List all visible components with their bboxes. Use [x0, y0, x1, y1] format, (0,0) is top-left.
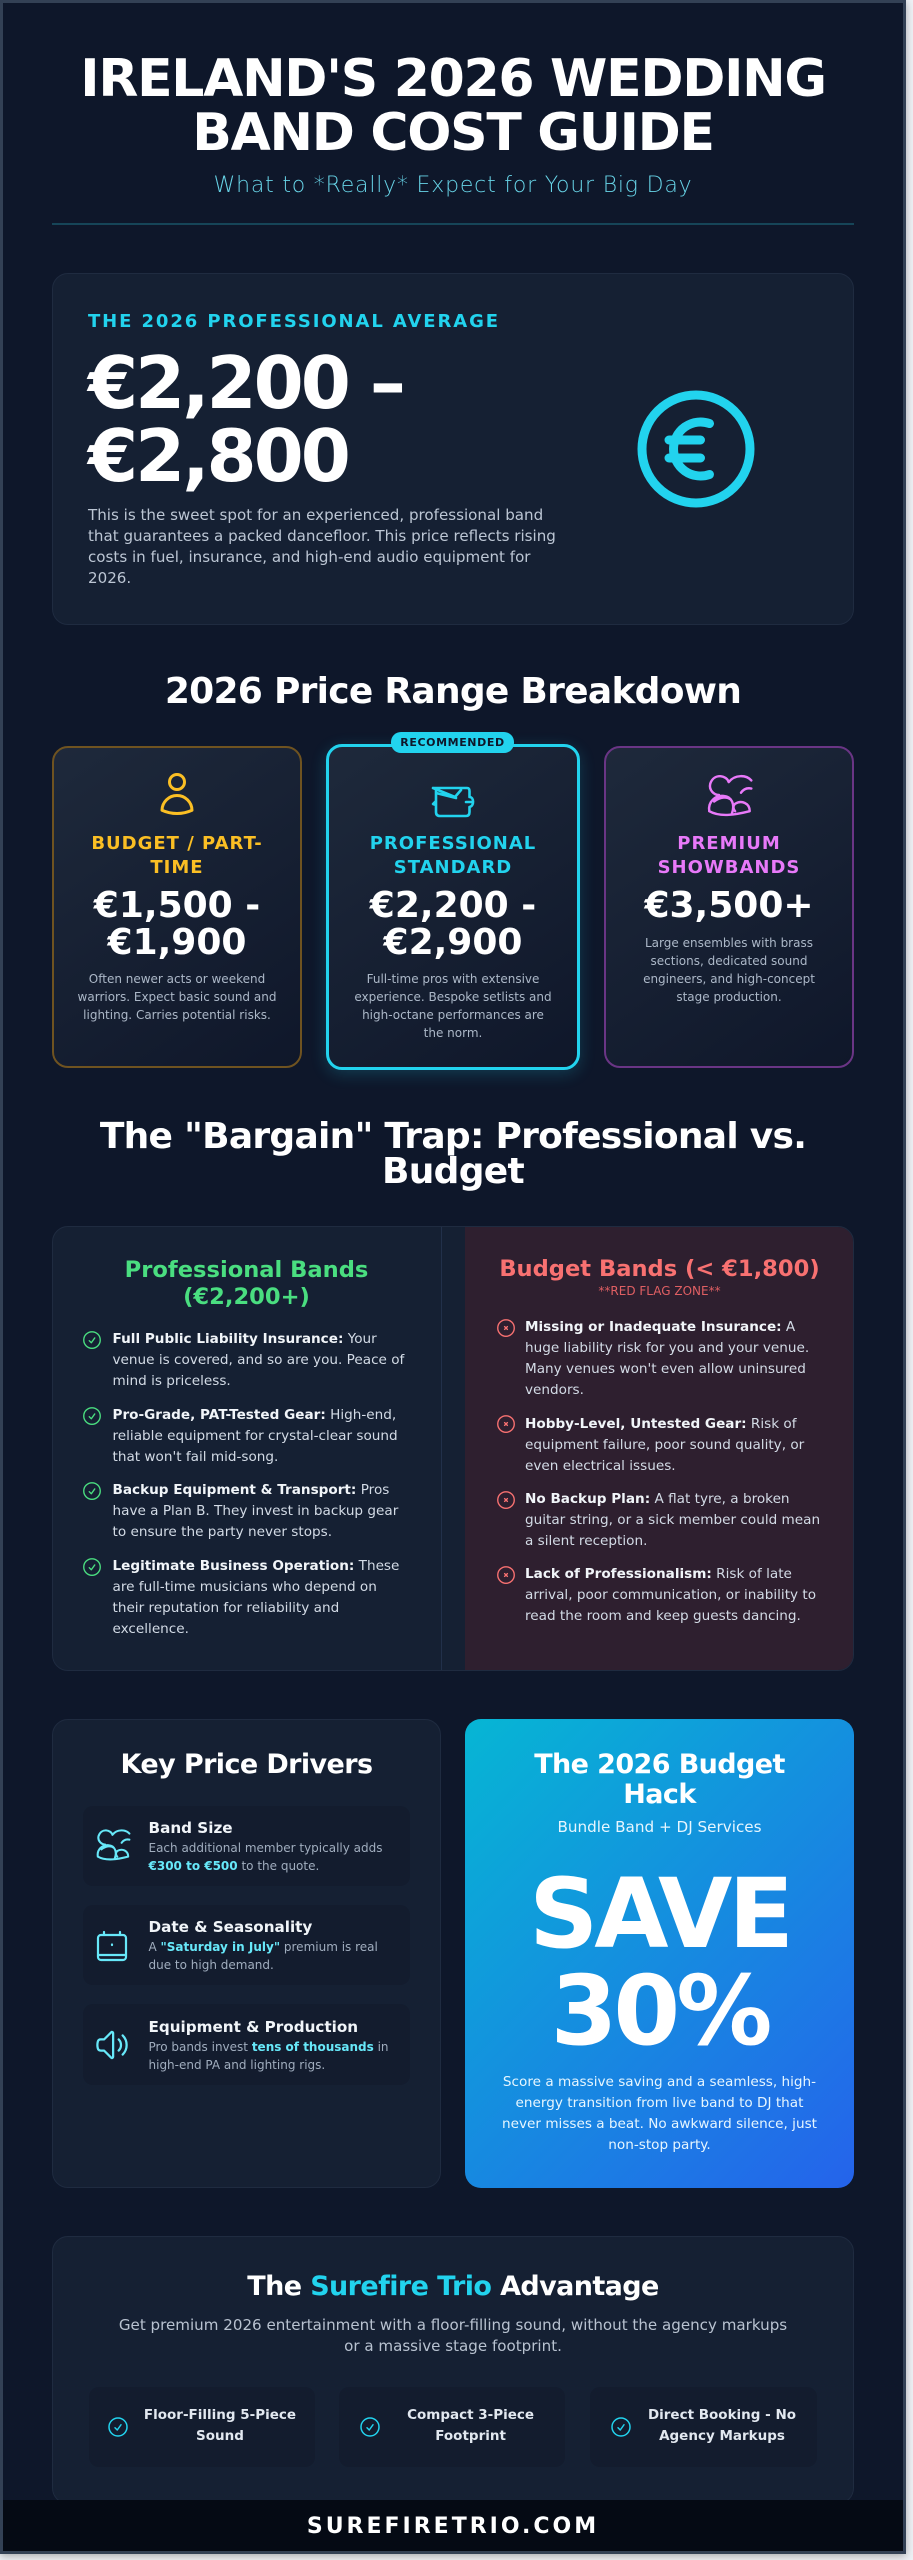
list item: insurance: Full Public Liability Insurance: Your [112, 1331, 377, 1347]
professional tier title: PROFESSIONAL [370, 833, 536, 854]
list item: no backup: No Backup Plan: A flat tyre, a broken [525, 1491, 790, 1507]
panel: professional average [52, 273, 854, 625]
list item: insurance: mind is priceless. [112, 1373, 231, 1389]
list item: no insurance [525, 1319, 809, 1398]
list item: business: excellence. [112, 1621, 189, 1637]
list item: insurance [112, 1331, 405, 1389]
budget hack description [465, 2072, 854, 2156]
band size description: Each additional member typically adds [148, 1841, 383, 1855]
icon: check [106, 2415, 130, 2439]
budget tier price [93, 885, 260, 963]
list item: business: their reputation for reliability and [112, 1600, 339, 1616]
panel: surefire trio [52, 2236, 854, 2504]
chip: floor-filling sound [88, 2387, 315, 2467]
list item: gear [112, 1407, 398, 1465]
list item: gear: that won't fail mid-song. [112, 1449, 278, 1465]
driver card: band size [83, 1806, 410, 1886]
key price drivers heading: Key Price Drivers [121, 1749, 372, 1780]
premium tier description: stage production. [676, 990, 782, 1004]
list item: hobby gear: equipment failure, poor sound quality, or [525, 1437, 804, 1453]
professional tier description: experience. Bespoke setlists and [354, 990, 552, 1004]
list item: business: Legitimate Business Operation: These [112, 1558, 399, 1574]
list item: unprofessional: arrival, poor communication, or inability to [525, 1587, 816, 1603]
icon: speaker [96, 2030, 128, 2060]
driver card: date [83, 1905, 410, 1985]
professional tier title [370, 833, 536, 878]
average description: costs in fuel, insurance, and high-end audio equipment for [88, 548, 531, 566]
professional tier price [369, 885, 536, 963]
list item: backup: to ensure the party never stops. [112, 1524, 332, 1540]
budget hack heading: Hack [623, 1779, 696, 1810]
budget hack heading: The 2026 Budget [534, 1749, 785, 1780]
budget hack description: Score a massive saving and a seamless, high- [503, 2074, 816, 2090]
list item: no insurance: huge liability risk for you and your venue. [525, 1340, 809, 1356]
heading: bargain trap: Budget [382, 1151, 524, 1192]
budget hack description: never misses a beat. No awkward silence, just [502, 2116, 817, 2132]
panel: professional tier [326, 744, 580, 1070]
surefire trio heading: The Surefire Trio Advantage [247, 2271, 659, 2302]
premium tier description: Large ensembles with brass [645, 936, 813, 950]
icon: group [708, 774, 753, 816]
professional tier price: €2,200 - [370, 885, 536, 926]
chip text [140, 2405, 300, 2447]
average description: that guarantees a packed dancefloor. This price reflects rising [88, 527, 556, 545]
save 30 percent: 30% [551, 1955, 768, 2067]
icon: cross [497, 1566, 515, 1584]
list item: unprofessional: read the room and keep guests dancing. [525, 1608, 801, 1624]
chip text: Floor-Filling 5-Piece [144, 2407, 296, 2423]
date title: Date & Seasonality [148, 1918, 312, 1936]
premium tier description [643, 936, 815, 1004]
average price: €2,200 – [88, 341, 403, 425]
list item: gear: reliable equipment for crystal-clear sound [112, 1428, 398, 1444]
icon: check [83, 1558, 101, 1576]
title [80, 49, 826, 163]
premium tier price: €3,500+ [644, 885, 814, 926]
icon: cross [497, 1491, 515, 1509]
budget tier title [91, 833, 263, 878]
list item: backup: Backup Equipment & Transport: Pros [112, 1482, 389, 1498]
icon: euro coin [638, 390, 754, 508]
list item: unprofessional: Lack of Professionalism: Risk of late [525, 1566, 792, 1582]
equipment description [148, 2040, 389, 2072]
list item: business [112, 1558, 399, 1637]
list item: business: are full-time musicians who depend on [112, 1579, 377, 1595]
list item: no backup [525, 1491, 820, 1549]
professional bands heading [125, 1257, 368, 1310]
panel: comparison [52, 1226, 854, 1671]
professional bands heading: Professional Bands [125, 1257, 368, 1283]
average price: €2,800 [88, 414, 348, 498]
list item: hobby gear: even electrical issues. [525, 1458, 676, 1474]
icon: guitar case [432, 786, 474, 818]
surefire trio description [52, 2315, 854, 2357]
professional bands heading: (€2,200+) [183, 1284, 310, 1310]
budget bands heading: Budget Bands (< €1,800) [499, 1256, 820, 1282]
date description: due to high demand. [148, 1958, 274, 1972]
icon: group [96, 1829, 130, 1860]
chip: direct booking [590, 2387, 817, 2467]
icon: person [160, 773, 194, 815]
professional tier price: €2,900 [384, 922, 522, 963]
heading: price range: 2026 Price Range Breakdown [165, 671, 741, 712]
title: BAND COST GUIDE [192, 103, 714, 163]
band size description: €300 to €500 to the quote. [148, 1859, 319, 1873]
driver card: equipment [83, 2004, 410, 2085]
band size title: Band Size [148, 1819, 233, 1837]
icon: cross [497, 1319, 515, 1337]
icon: check [83, 1482, 101, 1500]
footer: SUREFIRETRIO.COM [307, 2514, 599, 2539]
surefire trio description: or a massive stage footprint. [344, 2337, 562, 2355]
average description [88, 506, 556, 587]
list item: unprofessional [525, 1566, 816, 1624]
list item: no insurance: Missing or Inadequate Insurance: A [525, 1319, 795, 1335]
title: IRELAND'S 2026 WEDDING [80, 49, 826, 109]
icon: check [608, 2415, 632, 2439]
equipment title: Equipment & Production [148, 2018, 358, 2036]
list item: hobby gear [525, 1416, 804, 1474]
recommended badge [391, 732, 514, 753]
average label: THE 2026 PROFESSIONAL AVERAGE [88, 311, 500, 332]
budget hack description: energy transition from live band to DJ that [516, 2095, 803, 2111]
surefire trio description: Get premium 2026 entertainment with a floor-filling sound, without the agency markups [119, 2316, 787, 2334]
save 30 percent: SAVE [529, 1858, 790, 1970]
panel: premium tier [604, 746, 854, 1068]
list item: insurance: venue is covered, and so are you. Peace of [112, 1352, 404, 1368]
date description: A "Saturday in July" premium is real [148, 1940, 378, 1954]
footer [0, 2500, 906, 2554]
band size description [148, 1841, 383, 1873]
save 30 percent [465, 1866, 854, 2060]
chip text: Sound [196, 2428, 244, 2444]
list item: backup: have a Plan B. They invest in backup gear [112, 1503, 398, 1519]
chip text [642, 2405, 802, 2447]
budget tier title: TIME [150, 857, 204, 878]
list item: no insurance: vendors. [525, 1382, 584, 1398]
heading: bargain trap [100, 1116, 806, 1192]
budget hack subtitle: Bundle Band + DJ Services [557, 1818, 762, 1836]
equipment description: Pro bands invest tens of thousands in [148, 2040, 389, 2054]
panel: budget hack [465, 1719, 854, 2188]
list item: no backup: guitar string, or a sick member could mean [525, 1512, 820, 1528]
panel: key price drivers [52, 1719, 441, 2188]
premium tier title: PREMIUM [677, 833, 781, 854]
heading: bargain trap: The "Bargain" Trap: Professional vs. [100, 1116, 806, 1157]
equipment description: high-end PA and lighting rigs. [148, 2058, 325, 2072]
recommended badge: RECOMMENDED [400, 736, 505, 749]
professional tier description: Full-time pros with extensive [367, 972, 539, 986]
average description: 2026. [88, 569, 131, 587]
professional tier description: the norm. [424, 1026, 482, 1040]
chip: compact footprint [339, 2387, 565, 2467]
list item: backup [112, 1482, 398, 1540]
chip text: Agency Markups [659, 2428, 785, 2444]
chip text: Direct Booking - No [648, 2407, 796, 2423]
icon: calendar [96, 1930, 128, 1962]
subtitle: What to *Really* Expect for Your Big Day [214, 173, 692, 198]
icon: check [358, 2415, 382, 2439]
chip text: Footprint [435, 2428, 506, 2444]
list item: no backup: a silent reception. [525, 1533, 647, 1549]
budget tier description: warriors. Expect basic sound and [78, 990, 276, 1004]
budget hack description: non-stop party. [608, 2137, 711, 2153]
professional tier description: high-octane performances are [362, 1008, 544, 1022]
average price [86, 341, 403, 498]
red flag note: **RED FLAG ZONE** [598, 1284, 721, 1298]
budget tier price: €1,900 [108, 922, 246, 963]
professional tier title: STANDARD [394, 857, 512, 878]
professional tier description [354, 972, 552, 1040]
budget tier description: Often newer acts or weekend [89, 972, 265, 986]
list item: no insurance: Many venues won't even allow uninsured [525, 1361, 806, 1377]
date description [148, 1940, 378, 1972]
budget tier title: BUDGET / PART- [91, 833, 263, 854]
premium tier title [658, 833, 800, 878]
icon: check [83, 1407, 101, 1425]
chip text [391, 2405, 551, 2447]
premium tier title: SHOWBANDS [658, 857, 800, 878]
budget tier description: lighting. Carries potential risks. [83, 1008, 271, 1022]
budget tier price: €1,500 - [94, 885, 260, 926]
average description: This is the sweet spot for an experienced, professional band [88, 506, 543, 524]
panel: budget tier [52, 746, 302, 1068]
premium tier description: engineers, and high-concept [643, 972, 815, 986]
icon: cross [497, 1415, 515, 1433]
list item: gear: Pro-Grade, PAT-Tested Gear: High-end, [112, 1407, 396, 1423]
budget hack heading [534, 1749, 785, 1810]
chip text: Compact 3-Piece [407, 2407, 534, 2423]
budget tier description [78, 972, 276, 1022]
premium tier description: sections, dedicated sound [651, 954, 807, 968]
list item: hobby gear: Hobby-Level, Untested Gear: Risk of [525, 1416, 797, 1432]
icon: check [83, 1331, 101, 1349]
